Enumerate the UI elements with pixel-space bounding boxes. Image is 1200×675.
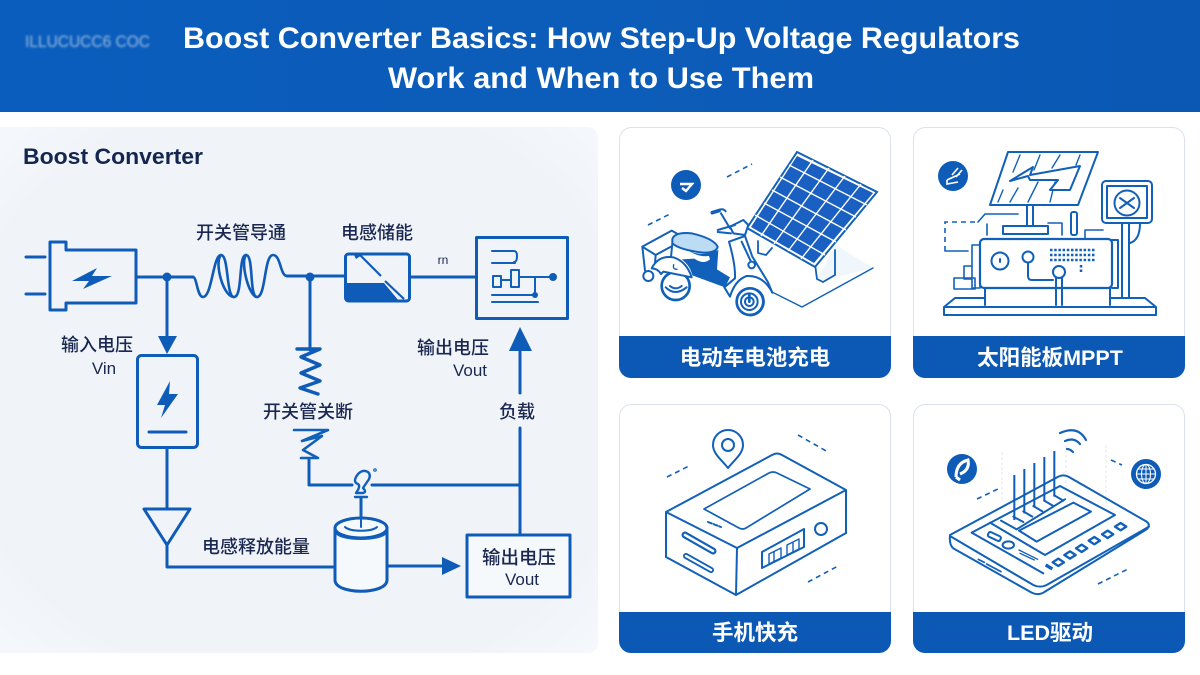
icon: diode triangle [144,509,190,545]
card: solar MPPT [913,128,1185,378]
icon: inductor coil [193,255,287,297]
LED row [1053,523,1126,566]
label: switch off: 开关管关断 [263,402,353,422]
icon: leaf badge [947,454,977,484]
icon: inductor storage box [345,254,410,301]
icon: badge check [671,170,701,200]
icon: main unit [980,239,1118,305]
arrow: up to controller [509,327,532,351]
panel heading: Boost Converter [23,144,203,169]
card banner [913,612,1185,653]
card caption: 电动车电池充电 [680,346,830,370]
icon: monitor on pole [1102,181,1152,298]
label: output voltage: 输出电压 [417,338,489,358]
ground and shadow [772,245,873,307]
motion dashes [648,164,752,225]
panel: boost converter circuit [0,127,598,653]
icon: wifi arcs [1060,430,1086,452]
output voltage box: Vout [505,570,539,589]
icon: badge [938,161,968,191]
icon: charger box [666,454,846,595]
resistor lower [294,430,328,458]
faint vertical guides [1002,445,1106,505]
label: input voltage: Vin [92,359,116,378]
circuit wires [136,276,520,567]
label: output voltage [417,338,489,380]
title [183,22,1020,95]
dashes [977,460,1128,584]
arrow: down to battery [158,336,177,354]
arrow: to output [442,557,461,575]
icon: controller box [476,238,568,318]
card caption: 手机快充 [712,621,798,645]
icon: capacitor cylinder [335,512,387,591]
title: Work and When to Use Them [388,62,814,95]
icon: battery box [138,356,198,448]
card caption: LED驱动 [1007,621,1093,645]
label: input voltage: 输入电压 [61,335,133,355]
icon: base platform [944,288,1156,315]
label: inductor releases energy: 电感释放能量 [202,537,310,557]
stray label rn: rn [438,253,448,267]
blurred logo text: ILLUCUCC6 COC [25,32,150,51]
icon: globe badge [1131,459,1161,489]
resistor upper [297,349,320,394]
icon: solar panel [747,152,877,282]
output voltage box [467,535,570,597]
icon: scooter [642,209,772,315]
label: output voltage: Vout [453,361,487,380]
output voltage box: 输出电压 [482,547,556,568]
junction dots [162,272,314,282]
label: inductor stores energy: 电感储能 [341,223,413,243]
card: EV battery charging [619,128,891,378]
icon: location pin [713,430,743,468]
header banner [0,0,1200,112]
icon: spark switch [355,469,376,497]
dashes [667,435,838,582]
label: input voltage [61,335,133,378]
card: LED driver [913,404,1185,653]
label: switch on: 开关管导通 [196,223,286,243]
card banner [619,336,891,378]
icon: input plug [26,242,136,310]
card: phone fast charging [619,404,891,653]
icon: LED driver board [950,451,1149,594]
card banner [913,336,1185,378]
label: load: 负载 [499,402,535,422]
icon: solar panel and bolt [990,152,1098,234]
wires and connectors [945,212,1103,289]
card caption: 太阳能板MPPT [977,346,1123,370]
title: Boost Converter Basics: How Step-Up Voltage Regulators [183,22,1020,55]
card banner [619,612,891,653]
